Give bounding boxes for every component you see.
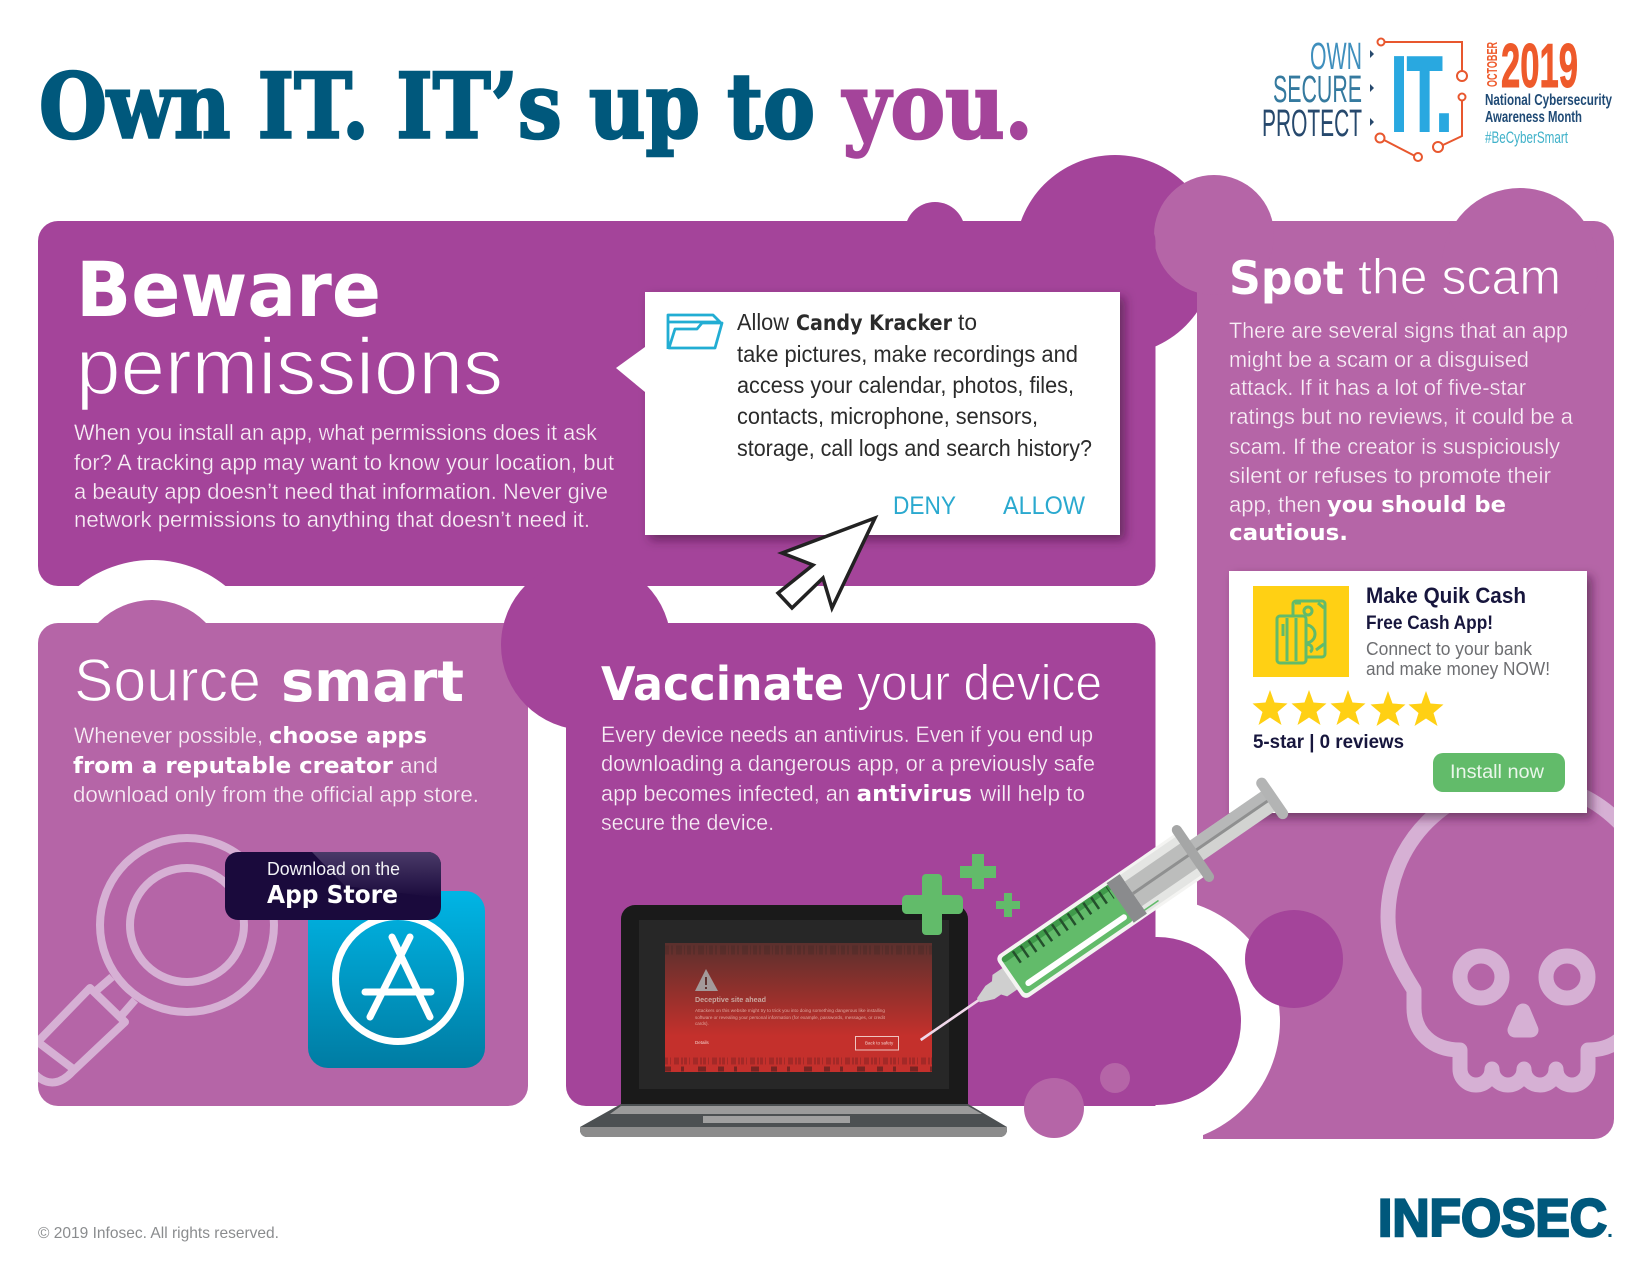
decorative circles [1024,1063,1130,1138]
heading: beware permissions: permissions [76,322,503,411]
card: fake app listing: Free Cash App! [1366,613,1493,634]
text: source advice: from a reputable creator [73,754,393,779]
card: fake app listing: 5-star | 0 reviews [1253,732,1404,753]
badge: download on the app store [225,852,441,920]
illustration: laptop with warning screen: Deceptive site ahead [695,997,766,1004]
logo: Infosec: . [1607,1220,1613,1242]
illustration: laptop with warning screen: cards). [695,1021,709,1026]
text: source advice: download only from the official app store. [73,782,479,807]
text: antivirus advice [601,722,1095,835]
panel: beware permissions [38,221,1156,608]
text: scam signs [1229,318,1574,546]
logo: Own Secure Protect IT, October 2019: PROTECT [1262,103,1362,145]
text: permissions explanation: for? A tracking app may want to know your location, but [74,450,614,475]
dialog: permission request: Candy Kracker [796,311,953,335]
dialog: permission request: storage, call logs and search history? [737,435,1092,461]
text: antivirus advice: Every device needs an antivirus. Even if you end up [601,722,1093,747]
card: fake app listing: and make money NOW! [1366,659,1550,679]
logo: Own Secure Protect IT, October 2019: SECURE [1273,69,1362,111]
illustration: laptop with warning screen: Back to safety [865,1040,894,1046]
text: antivirus advice: app becomes infected, an [601,781,850,806]
button: install now: Install now [1450,762,1544,783]
icon: magnifying glass [20,838,274,1082]
icon: app store [308,891,485,1068]
dialog: permission request: access your calendar, photos, files, [737,372,1074,398]
logo: Own Secure Protect IT, October 2019: Awareness Month [1485,109,1582,126]
text: antivirus advice: downloading a dangerous app, or a previously safe [601,751,1095,776]
text: antivirus advice: will help to [979,781,1085,806]
text: permissions explanation: network permissions to anything that doesn’t need it. [74,507,590,532]
logo: Own Secure Protect IT, October 2019: OCTOBER [1484,42,1501,87]
text: source advice: Whenever possible, [74,723,263,748]
dialog: permission request [616,292,1120,535]
icon: mouse cursor [778,518,875,608]
illustration: syringe [902,768,1296,1068]
text: scam signs: silent or refuses to promote their [1229,463,1551,488]
text: scam signs: might be a scam or a disguised [1229,347,1529,372]
text: scam signs: cautious. [1229,521,1348,546]
title: Own IT. IT’s up to [39,54,815,160]
heading: vaccinate your device [601,655,1102,711]
card: fake app listing [1229,571,1587,813]
card: fake app listing: Connect to your bank [1366,639,1533,659]
title: you. [841,54,1033,160]
heading: source smart [74,647,464,715]
heading: vaccinate your device: your device [857,655,1102,711]
icon: folder [668,315,722,349]
badge: download on the app store: App Store [267,880,398,909]
text: antivirus advice: secure the device. [601,810,774,835]
panel: source smart [20,560,528,1106]
heading: spot the scam [1229,249,1561,305]
panel: spot the scam [1154,175,1614,1139]
heading: source smart: smart [281,650,464,715]
dialog: permission request: contacts, microphone, sensors, [737,403,1038,429]
text: source advice [73,723,479,807]
heading: spot the scam: the scam [1358,249,1561,305]
text: scam signs: attack. If it has a lot of five-star [1229,375,1526,400]
illustration: laptop with warning screen: Details [695,1040,710,1045]
text: source advice: and [400,753,438,778]
icon: skull [1380,790,1614,1092]
dialog: permission request: Allow [737,309,789,335]
text: permissions explanation [74,420,614,532]
logo: Own Secure Protect IT, October 2019 [1262,32,1612,161]
icon: five stars [1252,690,1444,726]
heading: source smart: Source [74,647,261,714]
heading: vaccinate your device: Vaccinate [601,657,844,711]
illustration: laptop with warning screen: Attackers on this website might try to trick you into doing something dangerous like installing [695,1008,886,1013]
text: scam signs: app, then [1229,492,1321,517]
heading: beware permissions: Beware [76,245,381,334]
heading: beware permissions [76,245,503,411]
logo: Own Secure Protect IT, October 2019: IT. [1391,36,1452,154]
panel: vaccinate your device [501,560,1296,1138]
logo: Infosec: INFOSEC [1378,1189,1607,1248]
button: install now [1433,753,1565,792]
icon: cash and card [1277,601,1325,663]
text: scam signs: ratings but no reviews, it could be a [1229,404,1574,429]
card: fake app listing: Make Quik Cash [1366,583,1526,608]
badge: download on the app store: Download on the [267,859,400,879]
dialog: permission request: take pictures, make recordings and [737,341,1078,367]
logo: Own Secure Protect IT, October 2019: OWN [1310,36,1362,78]
heading: spot the scam: Spot [1229,251,1344,305]
illustration: laptop with warning screen: software or revealing your personal information (for example, passwords, messages, or credit [695,1015,886,1020]
text: scam signs: There are several signs that an app [1229,318,1568,343]
cloud behind beware panel [905,155,1215,355]
footer: copyright: © 2019 Infosec. All rights reserved. [38,1225,279,1242]
logo: Own Secure Protect IT, October 2019: 2019 [1501,32,1578,101]
logo: Own Secure Protect IT, October 2019: #BeCyberSmart [1485,128,1568,147]
icon: green plus signs [902,854,1020,935]
text: antivirus advice: antivirus [856,782,972,807]
text: scam signs: you should be [1327,493,1506,518]
text: source advice: choose apps [269,724,427,749]
dialog: permission request: DENY [893,492,956,520]
illustration: laptop with warning screen [580,905,1007,1137]
text: permissions explanation: a beauty app doesn’t need that information. Never give [74,479,608,504]
text: permissions explanation: When you install an app, what permissions does it ask [74,420,598,445]
dialog: permission request: to [958,309,977,335]
text: scam signs: scam. If the creator is suspiciously [1229,434,1560,459]
dialog: permission request: ALLOW [1003,492,1085,520]
